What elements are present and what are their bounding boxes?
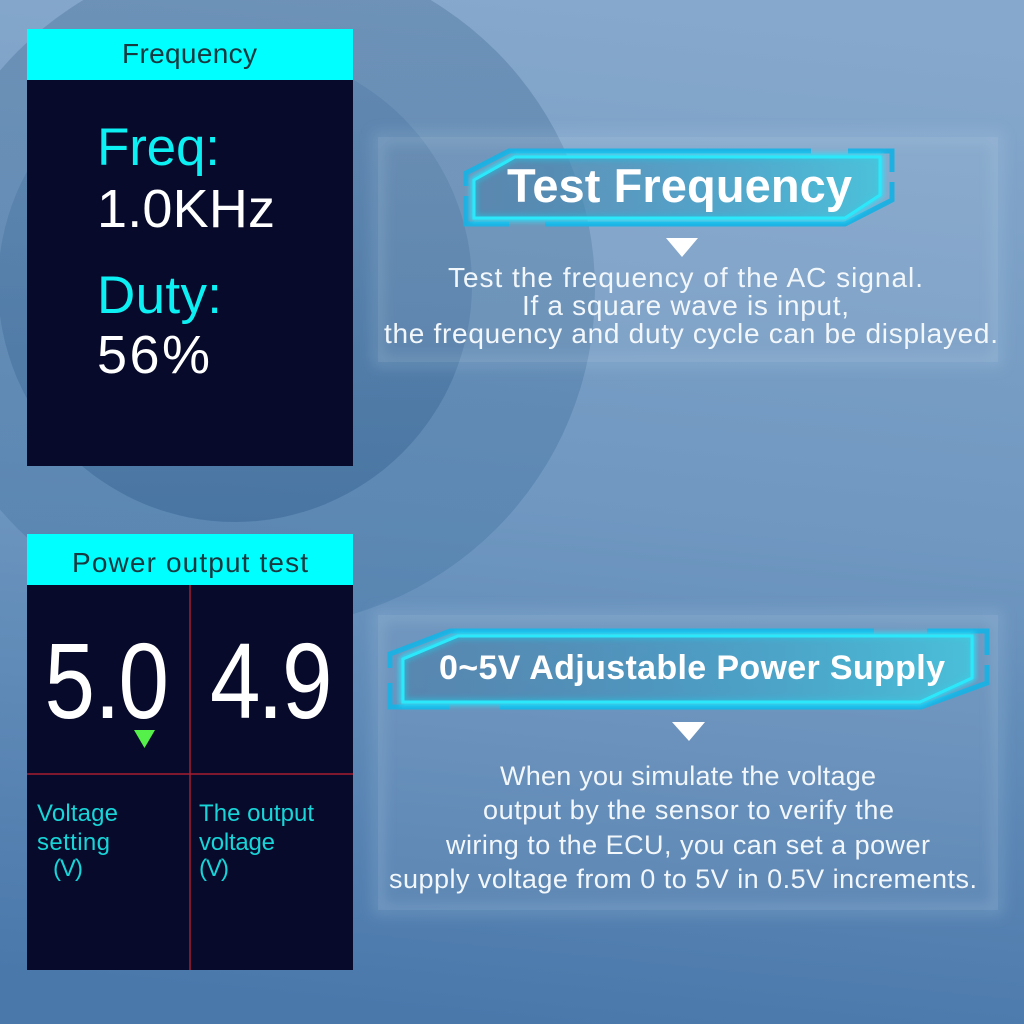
output voltage label xyxy=(199,800,314,882)
selector triangle xyxy=(134,730,155,748)
voltage setting label xyxy=(37,800,118,882)
inner background circle xyxy=(0,48,472,522)
output voltage reading: . xyxy=(257,620,284,741)
description text: If a square wave is input, xyxy=(522,290,849,321)
down arrow xyxy=(672,722,705,741)
down arrow xyxy=(666,238,698,257)
frequency value: 1.0KHz xyxy=(97,179,275,239)
voltage setting label: Voltage xyxy=(37,800,118,827)
description text xyxy=(389,761,977,894)
panel: frequency screen xyxy=(27,29,353,466)
voltage setting reading xyxy=(44,620,169,742)
output voltage label: voltage xyxy=(199,829,275,856)
panel: test frequency xyxy=(378,137,998,362)
badge: test frequency xyxy=(466,151,892,224)
output voltage reading: 4 xyxy=(210,622,260,742)
panel: adjustable power supply xyxy=(378,615,998,910)
voltage setting reading: . xyxy=(94,620,121,741)
power output heading: Power output test xyxy=(72,547,308,578)
description text: supply voltage from 0 to 5V in 0.5V increments. xyxy=(389,864,977,894)
description text: When you simulate the voltage xyxy=(500,761,876,791)
description text: wiring to the ECU, you can set a power xyxy=(445,830,930,860)
outer background circle xyxy=(0,0,595,628)
voltage setting label: (V) xyxy=(53,855,83,882)
output voltage reading xyxy=(210,620,332,742)
duty label: Duty: xyxy=(97,266,222,325)
badge title: Test Frequency xyxy=(507,159,852,212)
voltage setting reading: 5 xyxy=(44,622,95,742)
badge title: 0~5V Adjustable Power Supply xyxy=(439,649,945,687)
description text xyxy=(384,262,998,349)
grid lines xyxy=(27,585,353,970)
frequency label: Freq: xyxy=(97,118,220,177)
panel: power output screen xyxy=(27,534,353,970)
frequency screen heading: Frequency xyxy=(122,38,257,69)
description text: output by the sensor to verify the xyxy=(483,795,894,825)
duty value: 56% xyxy=(97,325,210,385)
description text: Test the frequency of the AC signal. xyxy=(448,262,923,293)
output voltage reading: 9 xyxy=(282,622,332,742)
output voltage label: The output xyxy=(199,800,314,827)
voltage setting reading: 0 xyxy=(118,622,169,742)
badge: power supply xyxy=(390,631,987,707)
voltage setting label: setting xyxy=(37,829,110,856)
description text: the frequency and duty cycle can be displayed. xyxy=(384,318,998,349)
output voltage label: (V) xyxy=(199,855,229,882)
